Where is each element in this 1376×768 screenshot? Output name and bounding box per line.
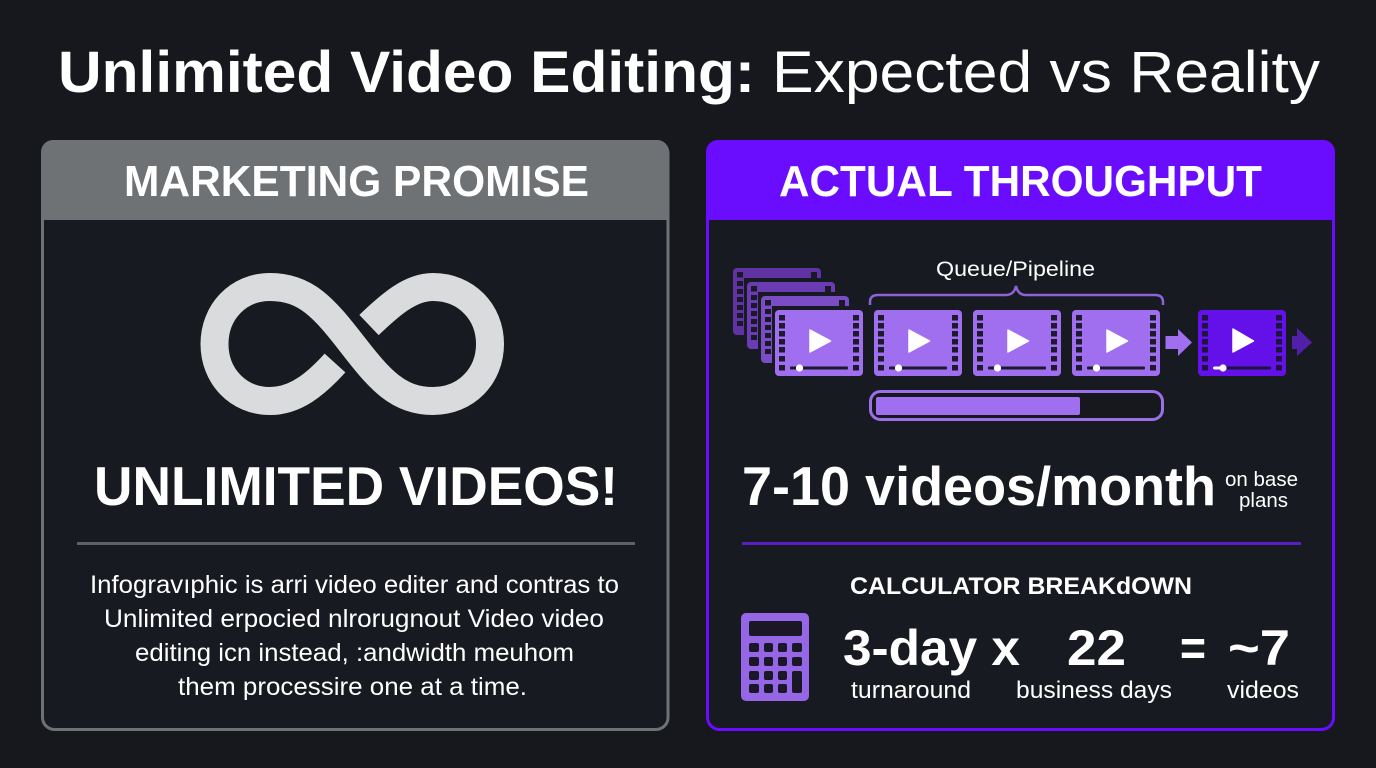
label: queue/pipeline: Queue/Pipeline: [936, 258, 1095, 281]
body text: Unlimited erpocied nlrorugnout Video video: [104, 605, 604, 633]
title: [58, 40, 1320, 105]
title: Unlimited Video Editing:: [58, 40, 755, 105]
formula: 3-day x 22 = ~7 videos: 22: [1067, 620, 1126, 676]
icon: calculator: [741, 613, 809, 701]
body text: them processire one at a time.: [178, 673, 527, 701]
heading: calculator breakdown: CALCULATOR BREAKdOWN: [850, 573, 1192, 600]
headline: unlimited videos: UNLIMITED VIDEOS!: [94, 455, 618, 517]
body text: Infogravıphic is arri video editer and contras to: [90, 571, 619, 599]
formula: 3-day x 22 = ~7 videos: =: [1180, 620, 1206, 676]
active video frame: [1198, 310, 1286, 376]
panel header: marketing promise: MARKETING PROMISE: [124, 157, 589, 206]
body text: [90, 571, 619, 701]
icon: infinity: [214, 287, 490, 401]
diagram: queue pipeline: [733, 258, 1312, 420]
panel header: marketing promise: [41, 140, 669, 220]
formula: 3-day x 22 = ~7 videos: videos: [1227, 677, 1299, 704]
title: Expected vs Reality: [772, 40, 1320, 105]
formula: 3-day x 22 = ~7 videos: [843, 620, 1299, 704]
body text: editing icn instead, :andwidth meuhom: [135, 639, 574, 667]
formula: 3-day x 22 = ~7 videos: 3-day x: [843, 620, 1020, 676]
arrow into processing: [1166, 329, 1192, 356]
formula: 3-day x 22 = ~7 videos: turnaround: [851, 677, 971, 704]
stat: videos per month: on base: [1225, 469, 1298, 491]
progress bar: [870, 392, 1162, 420]
panel header: actual throughput: ACTUAL THROUGHPUT: [779, 157, 1262, 206]
formula: 3-day x 22 = ~7 videos: business days: [1016, 677, 1172, 704]
panel header: actual throughput: [706, 140, 1335, 220]
formula: 3-day x 22 = ~7 videos: ~7: [1228, 620, 1290, 676]
stacked waiting frames: [733, 268, 849, 363]
bracket: [870, 286, 1163, 305]
video frames in queue: [775, 310, 1160, 376]
arrow out: [1292, 328, 1312, 356]
stat: videos per month: plans: [1239, 490, 1288, 512]
panel: marketing promise: [41, 140, 669, 730]
panel: actual throughput: [706, 140, 1335, 730]
stat: videos per month: 7-10 videos/month: [742, 455, 1216, 517]
